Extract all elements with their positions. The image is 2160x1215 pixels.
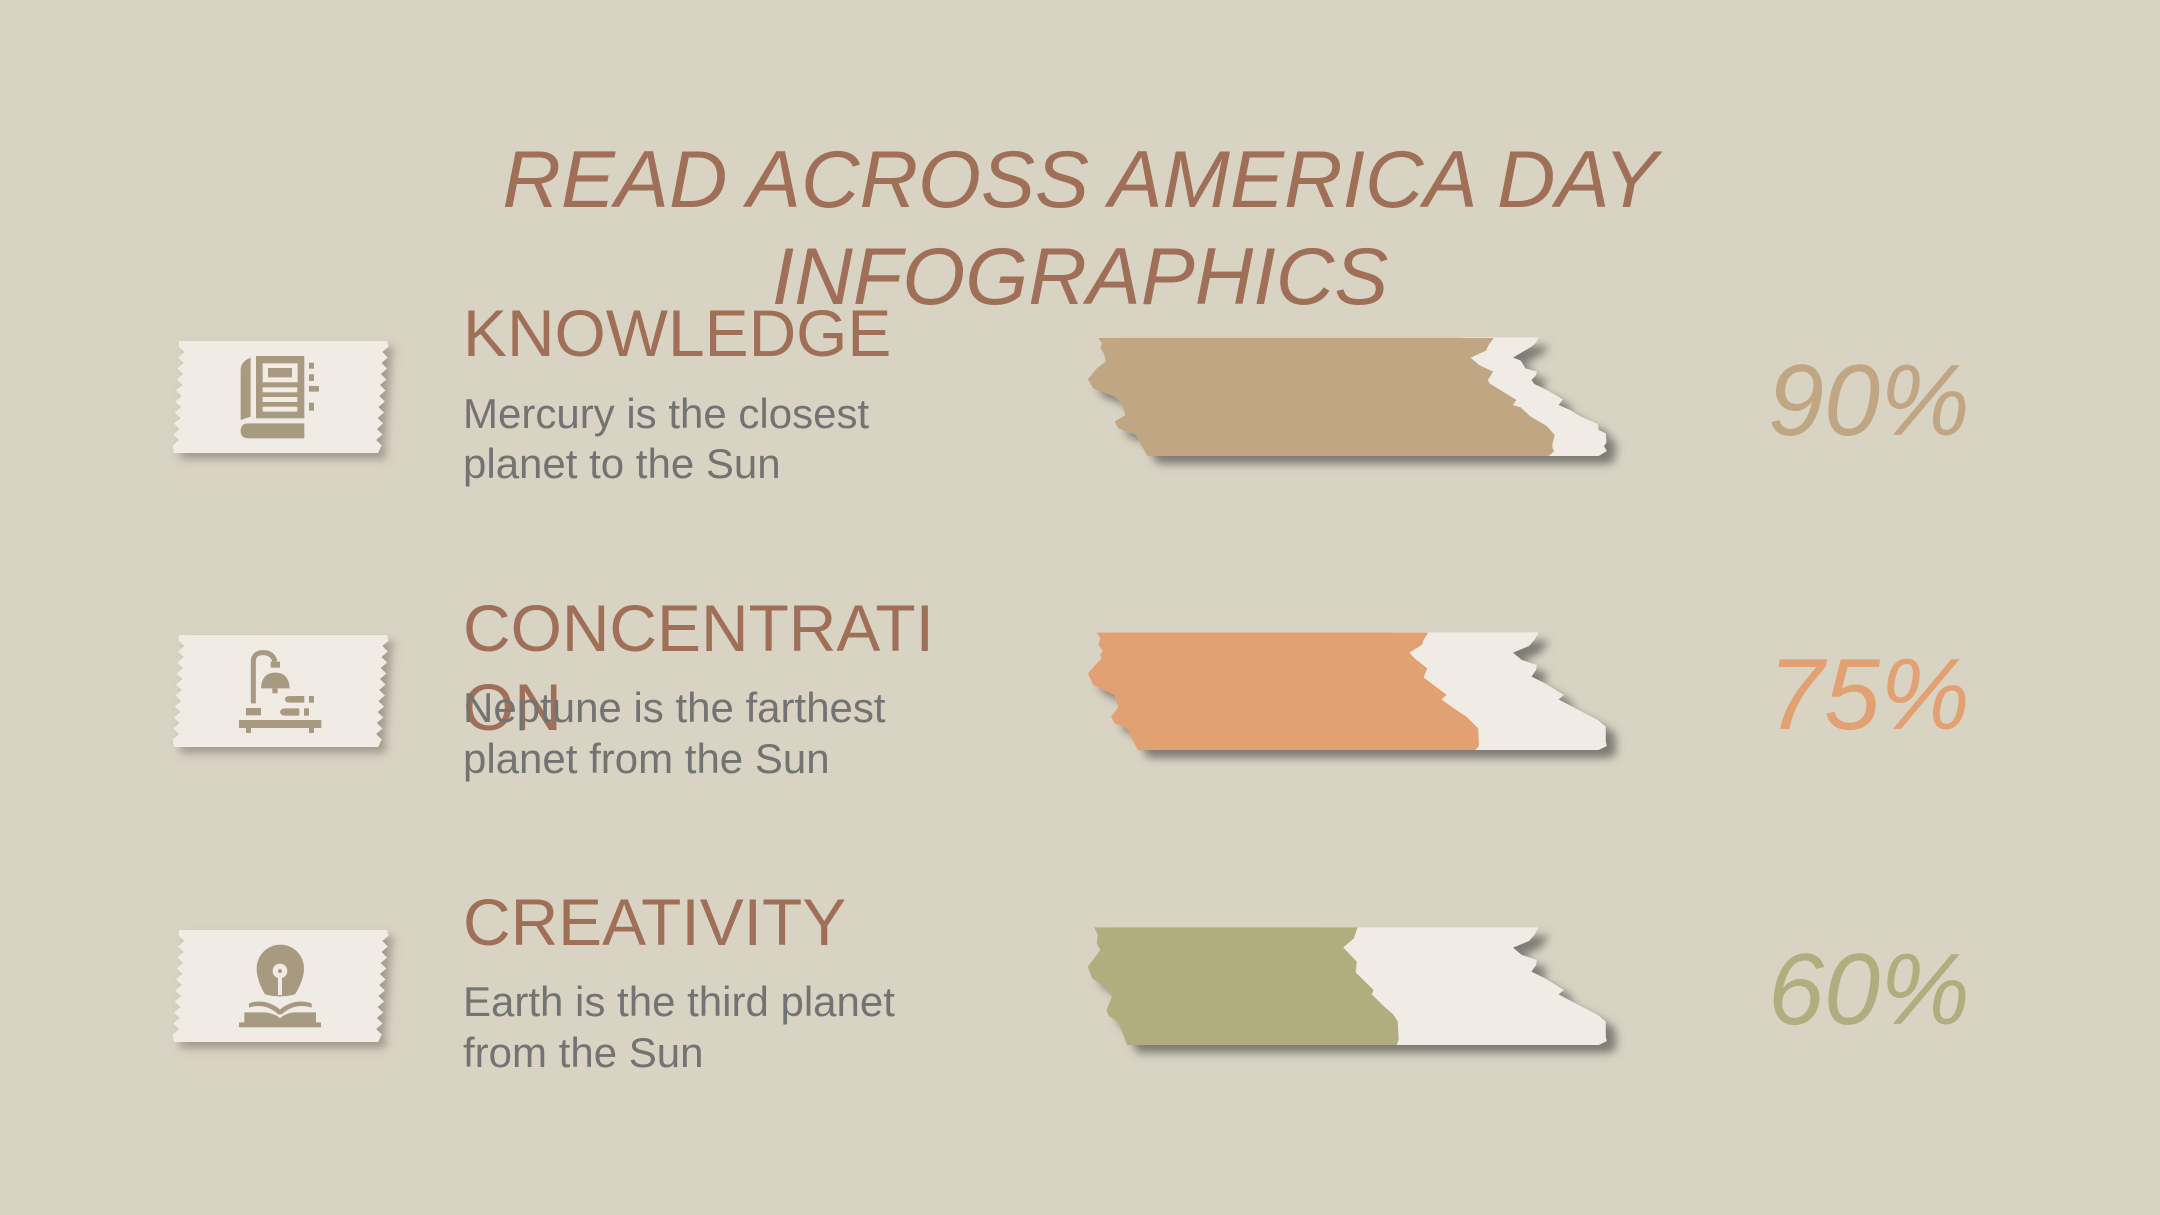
text: Creativity description: Earth is the third planet bbox=[463, 978, 895, 1025]
bar 1 fill bbox=[1088, 338, 1555, 456]
progress bar 2: 75% bbox=[1088, 632, 1607, 750]
title: INFOGRAPHICS bbox=[772, 232, 1388, 322]
bar 2 fill bbox=[1088, 633, 1479, 750]
text: Knowledge description: planet to the Sun bbox=[463, 440, 781, 487]
text: Creativity description bbox=[463, 978, 895, 1076]
text: Concentration description: Neptune is the farthest bbox=[463, 684, 886, 731]
row 2 ticket with desk lamp icon bbox=[173, 635, 389, 747]
heading: Knowledge: KNOWLEDGE bbox=[463, 296, 891, 370]
icon: book bbox=[241, 356, 319, 438]
value: 75%: 75% bbox=[1768, 639, 1970, 751]
row 1 ticket with book icon bbox=[173, 341, 389, 453]
value: 90%: 90% bbox=[1768, 345, 1970, 457]
bar 3 track bbox=[1320, 927, 1607, 1045]
heading: Concentration: CONCENTRATI bbox=[463, 591, 934, 665]
ticket 1 bbox=[173, 341, 389, 453]
row 3 ticket with bulb and book icon bbox=[173, 930, 389, 1042]
icon: light bulb over open book bbox=[239, 945, 321, 1027]
bar 1 track bbox=[1427, 337, 1607, 456]
title bbox=[502, 135, 1663, 322]
title: READ ACROSS AMERICA DAY bbox=[502, 135, 1663, 225]
ticket 3 bbox=[173, 930, 389, 1042]
progress bar 1: 90% bbox=[1088, 337, 1607, 456]
ticket 2 bbox=[173, 635, 389, 747]
bar 2 track bbox=[1391, 632, 1607, 750]
heading: Concentration bbox=[463, 591, 934, 744]
bar 3 fill bbox=[1088, 927, 1399, 1045]
text: Creativity description: from the Sun bbox=[463, 1029, 703, 1076]
heading: Concentration: ON bbox=[463, 670, 562, 744]
text: Knowledge description: Mercury is the closest bbox=[463, 390, 869, 437]
value: 60%: 60% bbox=[1768, 934, 1970, 1046]
text: Concentration description bbox=[463, 684, 886, 782]
text: Knowledge description bbox=[463, 390, 869, 487]
text: Concentration description: planet from the Sun bbox=[463, 735, 830, 782]
icon: desk lamp and books bbox=[239, 653, 321, 733]
progress bar 3: 60% bbox=[1088, 927, 1607, 1045]
heading: Creativity: CREATIVITY bbox=[463, 885, 846, 959]
